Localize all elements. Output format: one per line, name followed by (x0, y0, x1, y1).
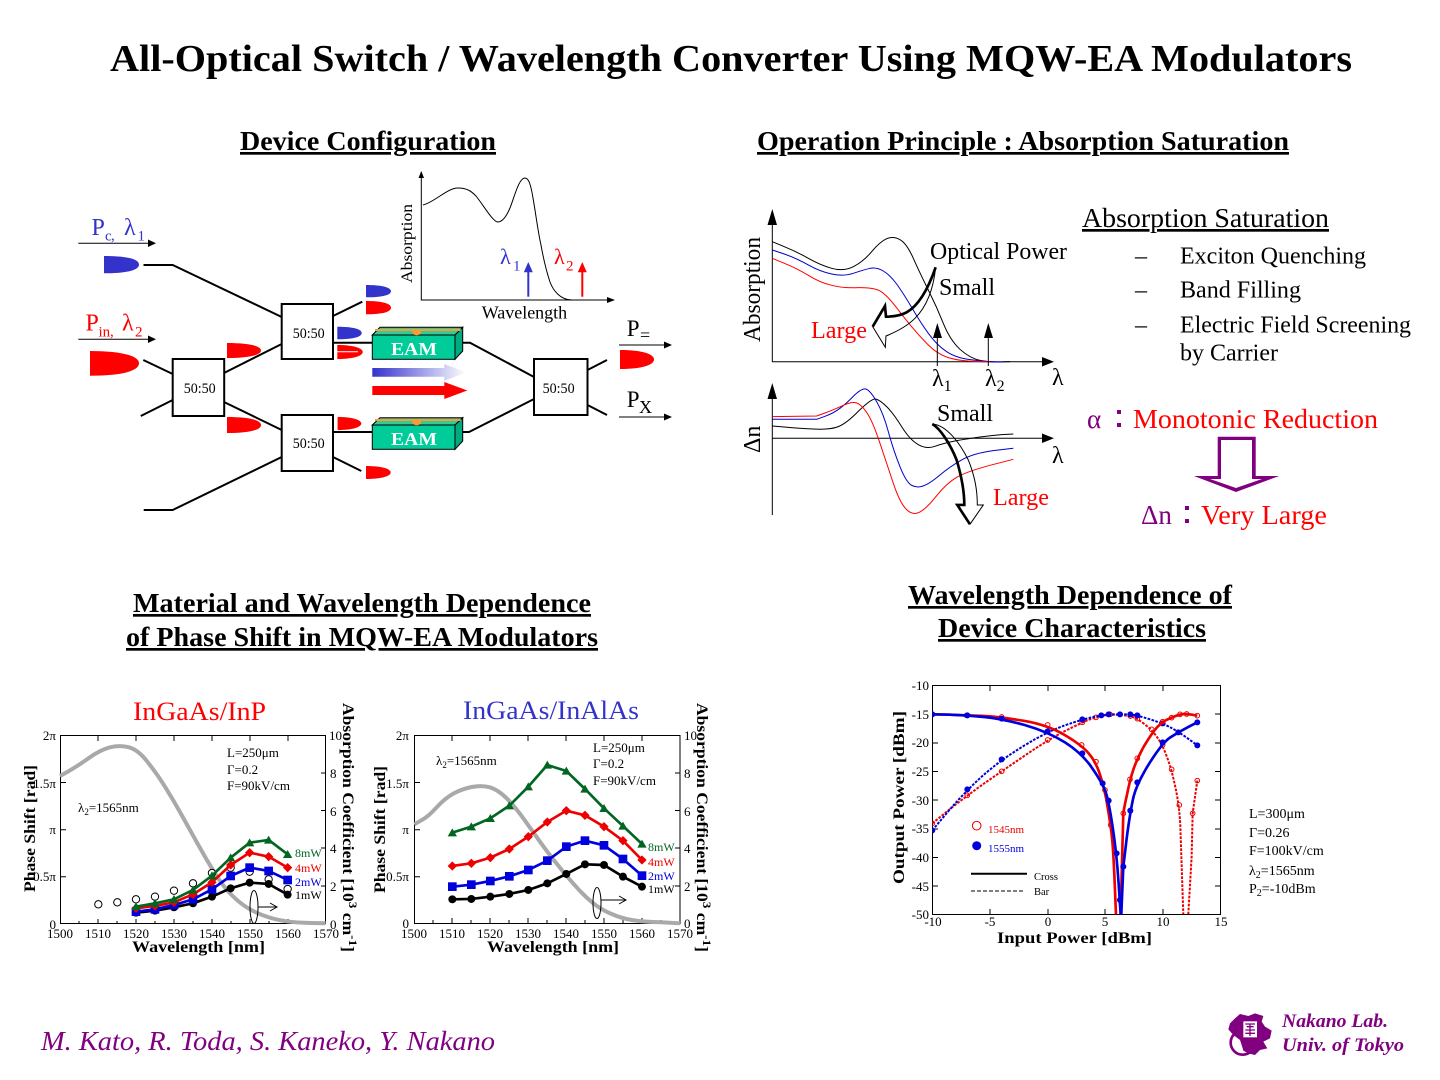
bullet 3: – (1134, 312, 1148, 338)
arrow: signal (372, 382, 467, 399)
coupler: upper 50:50 (282, 304, 333, 359)
curves in three powers (772, 389, 1013, 514)
x tick labels: 1550 (237, 926, 263, 941)
heading: wavelength dependence of device characteristics (908, 580, 1233, 643)
data series (414, 765, 680, 923)
coupler: input 50:50: 50:50 (184, 381, 216, 397)
y tick labels: -45 (912, 879, 929, 894)
arrow: P= output (619, 342, 672, 348)
lab name: Nakano Lab. (1281, 1011, 1388, 1032)
lambda1 marker: 1 (513, 259, 520, 275)
x tick labels: 1510 (439, 926, 465, 941)
legend (971, 821, 1058, 898)
left tick labels: 0 (50, 917, 56, 932)
x tick labels: 1530 (515, 926, 541, 941)
parameters: F=90kV/cm (593, 773, 656, 788)
series labels: 4mW (295, 861, 322, 875)
legend: Cross (1034, 872, 1058, 883)
label: Pc lambda1: 1 (138, 229, 145, 245)
y tick labels: -20 (912, 735, 929, 750)
text block: device parameters: λ (1249, 864, 1256, 879)
chart title: InGaAs/InAlAs (463, 696, 639, 725)
lambda2 note: 2 (84, 807, 89, 817)
coupler: output 50:50: 50:50 (543, 381, 575, 397)
y axis label: Phase Shift [rad] (372, 766, 389, 893)
chart: absorption vs lambda (740, 209, 1067, 395)
lambda2 note: λ (436, 753, 442, 768)
text block: device parameters: 2 (1257, 888, 1262, 899)
heading: wavelength dependence of device characteristics: Wavelength Dependence of (908, 580, 1233, 610)
series labels: 2mW (648, 869, 675, 883)
arrow: control fading (372, 364, 467, 381)
label: P= output: P (627, 316, 639, 341)
lambda2 marker (984, 323, 1005, 395)
lambda1 marker (932, 323, 952, 395)
parameters: L=250μm (593, 740, 645, 755)
x tick labels: -5 (985, 914, 995, 929)
bullet 2: – (1134, 278, 1148, 304)
series labels (295, 846, 322, 902)
text block: device parameters: L=300μm (1249, 807, 1305, 822)
inset chart: absorption vs wavelength (399, 171, 615, 322)
coupler: upper 50:50: 50:50 (293, 326, 325, 342)
right axis label: Absorption Coefficient [10 (339, 703, 356, 884)
heading: device configuration: Device Configuration (240, 126, 496, 156)
x tick labels (924, 914, 1228, 929)
y axis label: Output Power [dBm] (891, 711, 908, 884)
text block: absorption saturation (1082, 203, 1411, 366)
right axis label: cm (339, 908, 356, 936)
label: Small: Small (939, 275, 995, 301)
lambda2 marker: 2 (997, 378, 1005, 395)
text block: device parameters: =1565nm (1261, 864, 1315, 879)
axis label lambda: λ (1052, 365, 1064, 391)
lambda2 marker: λ (554, 244, 565, 269)
label: PX output (627, 387, 652, 417)
bullet 2: Band Filling (1180, 278, 1301, 304)
label: Pin lambda2: , (110, 324, 114, 340)
title: All-Optical Switch / Wavelength Converter Using MQW-EA Modulators (110, 38, 1352, 80)
x tick labels: 1540 (553, 926, 579, 941)
heading: material and wavelength dependence: Material and Wavelength Dependence (133, 588, 591, 618)
left tick labels: 0.5π (33, 869, 56, 884)
right tick labels: 2 (330, 879, 336, 894)
chart: InGaAs/InP phase shift (22, 697, 360, 956)
x tick labels: 1560 (629, 926, 655, 941)
x tick labels: 0 (1045, 914, 1051, 929)
chart title: InGaAs/InP (133, 697, 266, 726)
x tick labels: 1540 (199, 926, 225, 941)
right tick labels: 4 (684, 841, 691, 856)
ellipse and arrow (593, 888, 626, 918)
x tick labels: 1570 (667, 926, 693, 941)
x tick labels: 1520 (123, 926, 149, 941)
lambda2 marker: λ (985, 366, 997, 392)
curves (932, 714, 1197, 914)
text block: device parameters: F=100kV/cm (1249, 844, 1324, 859)
x tick labels: -10 (924, 914, 942, 929)
arrow: curved hollow (873, 267, 936, 347)
right tick labels: 0 (330, 917, 336, 932)
x axis label: Wavelength [nm] (487, 939, 619, 956)
series labels (648, 840, 675, 896)
y tick labels (912, 678, 929, 922)
label: Pc lambda1: P (92, 215, 105, 241)
lambda2 note: 2 (442, 760, 447, 770)
left tick labels (386, 728, 409, 931)
EAM lower: EAM (391, 429, 437, 449)
parameters: L=250μm (227, 745, 279, 760)
x axis label: Input Power [dBm] (997, 930, 1152, 947)
arrow: Pin input (78, 336, 156, 343)
y tick labels: -15 (912, 707, 929, 722)
axis label: Absorption: Absorption (399, 204, 416, 283)
right axis label: ] (339, 946, 356, 952)
bullet 3: Electric Field Screening (1180, 312, 1411, 338)
bullet 1: Exciton Quenching (1180, 244, 1366, 270)
legend: Bar (1034, 887, 1050, 898)
callout: alpha monotonic reduction: Monotonic Reduction (1133, 404, 1379, 434)
label: Pin lambda2: in (98, 325, 111, 341)
series labels: 4mW (648, 855, 675, 869)
arrow: PX output (619, 414, 672, 420)
y tick labels: -35 (912, 821, 929, 836)
right tick labels: 4 (330, 841, 337, 856)
lambda1 marker (500, 244, 533, 297)
axis label delta n: Δn (740, 426, 766, 453)
data series (60, 746, 326, 923)
left tick labels: 0.5π (386, 869, 409, 884)
label: Pc lambda1: , (111, 228, 115, 244)
parameters (227, 745, 290, 793)
pulses (90, 256, 654, 479)
y tick labels: -50 (912, 907, 929, 922)
right axis label: cm (693, 908, 710, 936)
bullet 3: by Carrier (1180, 340, 1278, 366)
lambda1 marker: λ (500, 244, 511, 269)
x tick labels: 1500 (47, 926, 73, 941)
legend: 1545nm (988, 824, 1024, 836)
lambda1 marker: λ (932, 366, 944, 392)
left tick labels (33, 728, 56, 932)
axis label: Wavelength: Wavelength (482, 302, 567, 322)
x tick labels: 10 (1156, 914, 1170, 929)
label: PX output: X (639, 397, 652, 417)
subheading: Absorption Saturation (1082, 203, 1330, 233)
arrow: Pc input (78, 240, 156, 247)
heading: material and wavelength dependence: of Phase Shift in MQW-EA Modulators (126, 622, 598, 652)
right axis label: 3 (700, 902, 714, 908)
y axis label: Phase Shift [rad] (22, 765, 39, 892)
parameters: F=90kV/cm (227, 778, 290, 793)
frame and ticks (414, 736, 680, 924)
EAM upper: EAM (391, 339, 437, 359)
text block: device parameters: =-10dBm (1262, 882, 1316, 897)
callout: alpha monotonic reduction: α (1087, 404, 1101, 434)
text block: device parameters: Γ=0.26 (1249, 826, 1290, 841)
coupler: lower 50:50 (282, 415, 333, 471)
x tick labels: 1530 (161, 926, 187, 941)
series labels: 8mW (648, 840, 675, 854)
chart: output power vs input power (891, 678, 1228, 947)
label: P= output: = (640, 325, 650, 345)
y tick labels: -30 (912, 793, 929, 808)
heading: material and wavelength dependence (126, 588, 598, 652)
label: Pin lambda2: P (86, 311, 99, 337)
coupler: input 50:50 (173, 359, 224, 416)
x tick labels: 1550 (591, 926, 617, 941)
EAM upper (372, 327, 463, 359)
left tick labels: 0 (402, 916, 409, 931)
x axis label: Wavelength [nm] (132, 939, 265, 956)
axis label lambda: λ (1052, 443, 1064, 469)
chart: delta n vs lambda (740, 383, 1064, 524)
parameters: Γ=0.2 (227, 762, 258, 777)
right tick labels: 10 (684, 728, 697, 743)
right axis label: -1 (346, 935, 360, 946)
lambda2 marker (554, 244, 587, 297)
x tick labels: 5 (1102, 914, 1108, 929)
x tick labels: 1510 (85, 926, 111, 941)
left tick labels: 2π (43, 728, 56, 743)
right tick labels (329, 728, 342, 932)
right tick labels: 8 (330, 766, 336, 781)
panel: device configuration diagram (78, 171, 672, 510)
right tick labels: 6 (684, 804, 691, 819)
right tick labels: 10 (329, 728, 342, 743)
x tick labels: 15 (1214, 914, 1228, 929)
frame and ticks (60, 736, 326, 924)
parameters (593, 740, 656, 788)
lambda2 marker: 2 (566, 259, 574, 275)
x tick labels (401, 926, 693, 941)
x tick labels: 1500 (401, 926, 427, 941)
icon: University of Tokyo ginkgo logo (1228, 1013, 1272, 1055)
label: Large: Large (993, 485, 1049, 511)
label: Optical Power: Optical Power (930, 239, 1067, 265)
label: P= output (627, 316, 650, 345)
label: Large: Large (811, 318, 867, 344)
bullet 3 (1134, 312, 1411, 366)
label: Small: Small (937, 401, 993, 427)
ellipse and arrow (250, 890, 277, 924)
right tick labels: 0 (684, 916, 690, 931)
text block: device parameters: 2 (1256, 870, 1261, 881)
right tick labels: 8 (684, 766, 690, 781)
legend: 1555nm (988, 843, 1024, 855)
right tick labels (684, 728, 697, 931)
lab name (1281, 1011, 1404, 1056)
callout: delta n very large (1141, 500, 1327, 530)
lambda2 note: =1565nm (89, 800, 139, 815)
parameters: Γ=0.2 (593, 756, 624, 771)
callout: delta n very large: Δn (1141, 500, 1172, 530)
callout: delta n very large: Very Large (1201, 500, 1327, 530)
right tick labels: 2 (684, 879, 690, 894)
right tick labels: 6 (330, 804, 337, 819)
lambda1 marker: 1 (944, 378, 952, 395)
right axis label: Absorption Coefficient [10 (693, 703, 710, 884)
lab name: Univ. of Tokyo (1282, 1035, 1404, 1056)
right axis label: 3 (346, 902, 360, 908)
label: PX output: P (627, 387, 639, 412)
lambda2 note: λ (78, 800, 84, 815)
left tick labels: π (49, 822, 56, 837)
x tick labels (47, 926, 339, 941)
label: Pc lambda1 (92, 215, 145, 245)
chart: InGaAs/InAlAs phase shift (372, 696, 714, 956)
left tick labels: 1.5π (386, 776, 409, 791)
EAM lower (372, 418, 463, 449)
y tick labels: -10 (912, 678, 929, 693)
y tick labels: -40 (912, 850, 929, 865)
lambda2 note: =1565nm (447, 753, 497, 768)
y tick labels: -25 (912, 764, 929, 779)
frame and ticks (932, 686, 1220, 914)
x tick labels: 1520 (477, 926, 503, 941)
right axis label: ] (693, 946, 710, 952)
x tick labels: 1560 (275, 926, 301, 941)
left tick labels: π (402, 822, 409, 837)
label: Pc lambda1: c (105, 229, 112, 245)
coupler: output 50:50 (534, 359, 588, 415)
label: Pin lambda2: λ (122, 311, 134, 337)
coupler: lower 50:50: 50:50 (293, 436, 325, 452)
label: Pc lambda1: λ (124, 215, 136, 241)
label: Pin lambda2 (86, 311, 142, 341)
axis label Absorption: Absorption (740, 237, 766, 342)
right axis label: -1 (700, 935, 714, 946)
series labels: 2mW (295, 875, 322, 889)
waveguide lines (141, 265, 607, 510)
arrow: purple down (1194, 437, 1279, 492)
arrow: down hollow (932, 424, 983, 524)
heading: operation principle: Operation Principle : Absorption Saturation (757, 126, 1289, 156)
left tick labels: 1.5π (33, 776, 56, 791)
heading: wavelength dependence of device characteristics: Device Characteristics (938, 613, 1206, 643)
curves in three powers (772, 238, 1010, 362)
text block: device parameters: P (1249, 882, 1257, 897)
bullet 1: – (1134, 244, 1148, 270)
authors: M. Kato, R. Toda, S. Kaneko, Y. Nakano (40, 1026, 495, 1056)
series labels: 8mW (295, 846, 322, 860)
left tick labels: 2π (396, 728, 409, 743)
text block: device parameters (1249, 807, 1324, 899)
x tick labels: 1570 (313, 926, 339, 941)
label: Pin lambda2: 2 (135, 325, 142, 341)
series labels: 1mW (648, 882, 675, 896)
series labels: 1mW (295, 888, 322, 902)
